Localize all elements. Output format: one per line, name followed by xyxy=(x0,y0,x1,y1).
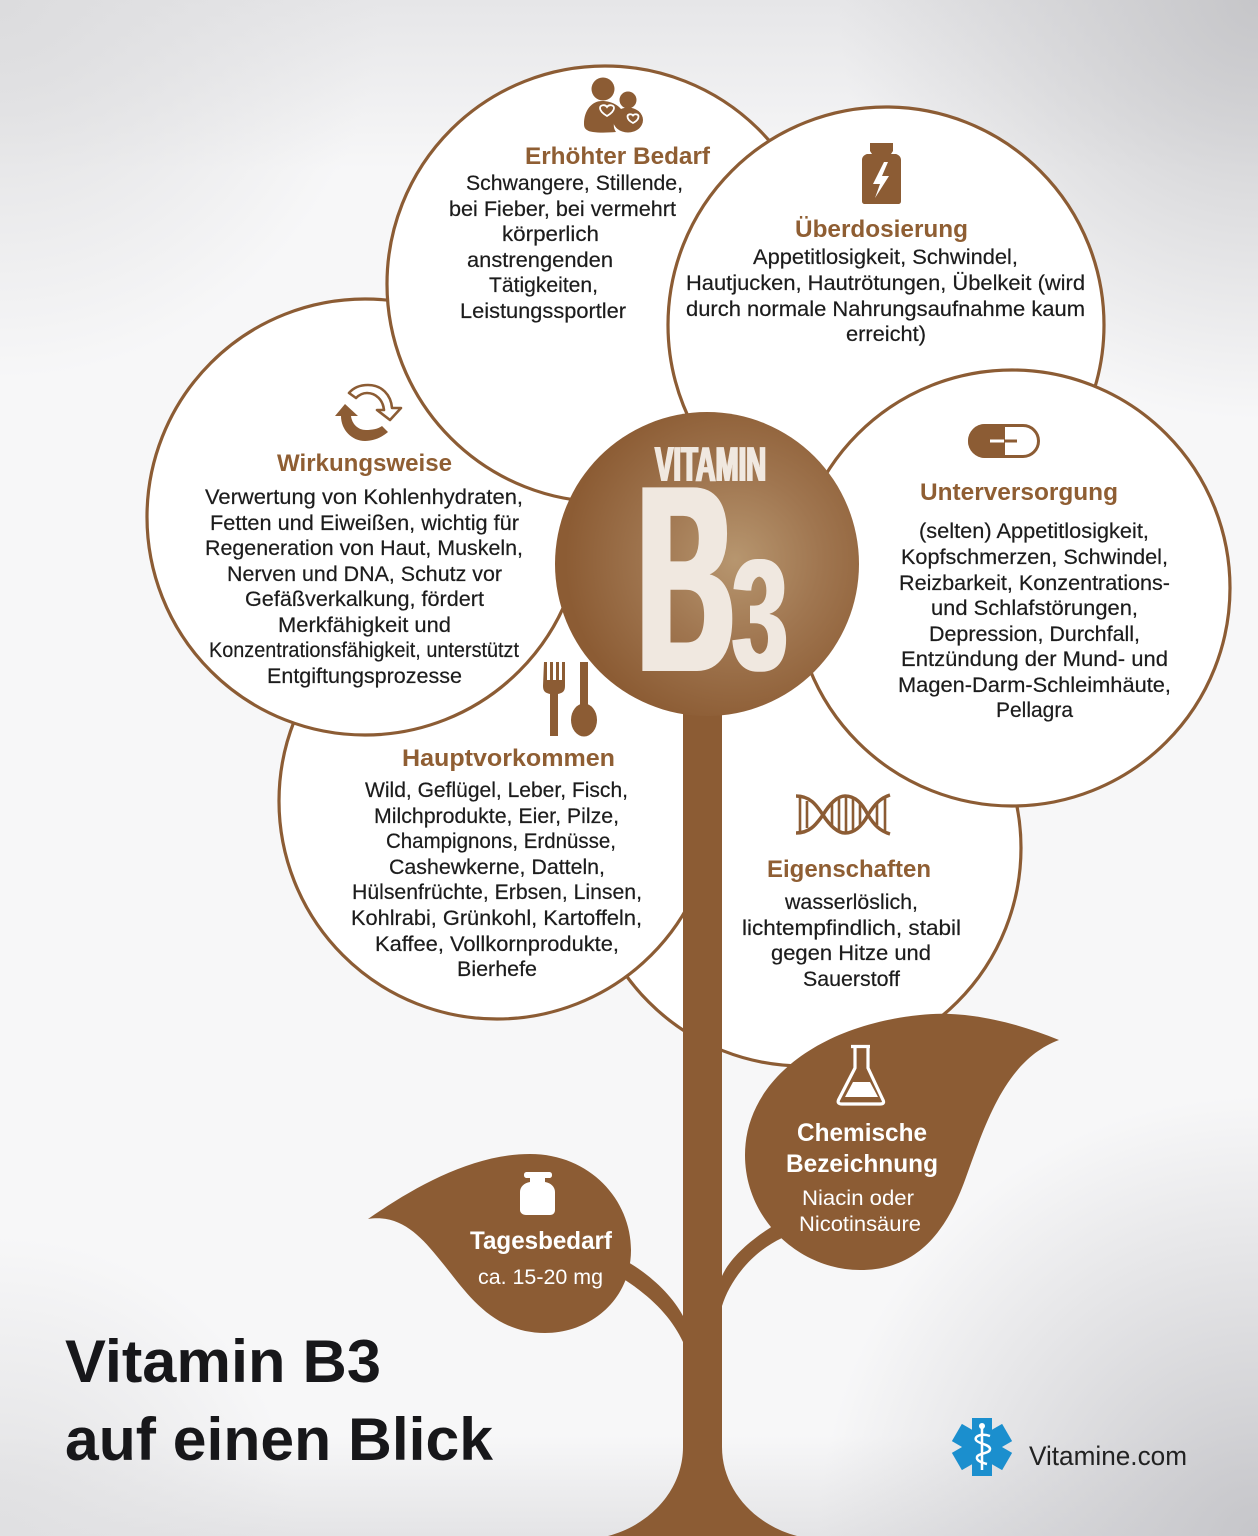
title: auf einen Blick xyxy=(65,1406,494,1473)
text: Hauptvorkommen body: Hülsenfrüchte, Erbsen, Linsen, xyxy=(352,881,642,904)
text: Hauptvorkommen body: Wild, Geflügel, Leber, Fisch, xyxy=(365,779,628,802)
panel: Wirkungsweise xyxy=(147,299,583,735)
heading: Hauptvorkommen: Hauptvorkommen xyxy=(402,745,615,772)
panel: Eigenschaften xyxy=(585,630,1021,1066)
text: Erhöhter Bedarf body: Tätigkeiten, xyxy=(489,274,598,297)
text: Hauptvorkommen body: Kaffee, Vollkornprodukte, xyxy=(375,933,619,956)
title xyxy=(65,1328,494,1473)
leaf: Tagesbedarf: ca. 15-20 mg xyxy=(478,1266,603,1289)
text: Hauptvorkommen body: Kohlrabi, Grünkohl, Kartoffeln, xyxy=(351,907,642,930)
text: Erhöhter Bedarf body: körperlich xyxy=(502,223,599,246)
text: Unterversorgung body: Magen-Darm-Schleimhäute, xyxy=(898,674,1171,697)
text: Erhöhter Bedarf body: anstrengenden xyxy=(467,249,613,272)
text: Wirkungsweise body: Fetten und Eiweißen, wichtig für xyxy=(210,512,519,535)
text: Wirkungsweise body: Konzentrationsfähigkeit, unterstützt xyxy=(209,639,519,662)
icon: fork and spoon xyxy=(543,662,597,736)
centre circle: Vitamin B3 xyxy=(555,412,859,728)
text: Hauptvorkommen body: Cashewkerne, Datteln, xyxy=(389,856,605,879)
leaf: Chemische Bezeichnung: Bezeichnung xyxy=(786,1150,938,1178)
heading: Unterversorgung: Unterversorgung xyxy=(920,479,1118,506)
label: VITAMIN: VITAMIN xyxy=(655,438,766,492)
text: Unterversorgung body: und Schlafstörungen, xyxy=(931,597,1138,620)
icon: star of life xyxy=(952,1418,1012,1476)
text: Erhöhter Bedarf body xyxy=(449,172,683,323)
text: Überdosierung body xyxy=(686,246,1085,346)
icon: mother and child xyxy=(584,78,643,133)
text: Hauptvorkommen body xyxy=(351,779,642,981)
icon: capsule xyxy=(968,424,1038,458)
icon: flask xyxy=(838,1046,884,1104)
text: Unterversorgung body xyxy=(898,520,1171,722)
text: Überdosierung body: erreicht) xyxy=(846,323,926,346)
tree trunk and branches xyxy=(608,700,797,1536)
text: Erhöhter Bedarf body: Schwangere, Stillende, xyxy=(466,172,683,195)
text: Unterversorgung body: Entzündung der Mund- und xyxy=(901,648,1168,671)
text: Eigenschaften body: gegen Hitze und xyxy=(771,942,931,965)
text: Unterversorgung body: Pellagra xyxy=(996,699,1073,722)
icon: DNA helix xyxy=(796,795,890,834)
heading: Erhöhter Bedarf: Erhöhter Bedarf xyxy=(525,143,711,170)
text: Unterversorgung body: Depression, Durchfall, xyxy=(929,623,1140,646)
text: Eigenschaften body: lichtempfindlich, stabil xyxy=(742,917,961,940)
text: Unterversorgung body: Kopfschmerzen, Schwindel, xyxy=(901,546,1168,569)
text: Überdosierung body: durch normale Nahrungsaufnahme kaum xyxy=(686,298,1085,321)
text: Chemische Bezeichnung: Chemische xyxy=(797,1119,927,1147)
text: Erhöhter Bedarf body: bei Fieber, bei vermehrt xyxy=(449,198,676,221)
text: Wirkungsweise body: Regeneration von Haut, Muskeln, xyxy=(205,537,523,560)
text: Hauptvorkommen body: Bierhefe xyxy=(457,958,537,981)
leaf: Chemische Bezeichnung: Nicotinsäure xyxy=(799,1213,921,1236)
heading: Wirkungsweise: Wirkungsweise xyxy=(277,450,452,477)
text: Eigenschaften body: wasserlöslich, xyxy=(784,891,918,914)
text: Wirkungsweise body: Nerven und DNA, Schutz vor xyxy=(227,563,502,586)
leaf: Tagesbedarf xyxy=(368,1154,631,1333)
text: Wirkungsweise body: Entgiftungsprozesse xyxy=(267,665,462,688)
icon: bottle with lightning xyxy=(862,143,901,204)
icon: weight xyxy=(520,1172,555,1215)
panel: Unterversorgung xyxy=(794,370,1230,806)
text: Erhöhter Bedarf body: Leistungssportler xyxy=(460,300,626,323)
panel: Erhöhter Bedarf xyxy=(387,66,823,502)
heading: Überdosierung: Überdosierung xyxy=(795,216,968,243)
text: Hauptvorkommen body: Champignons, Erdnüsse, xyxy=(386,830,616,853)
heading: Eigenschaften: Eigenschaften xyxy=(767,856,931,883)
label: B: B xyxy=(638,429,734,728)
text: Unterversorgung body: (selten) Appetitlosigkeit, xyxy=(919,520,1149,543)
panel: Überdosierung xyxy=(668,107,1104,543)
text: Überdosierung body: Appetitlosigkeit, Schwindel, xyxy=(753,246,1018,269)
text: Tagesbedarf: Tagesbedarf xyxy=(470,1227,613,1255)
text: Wirkungsweise body xyxy=(205,486,523,688)
text: Unterversorgung body: Reizbarkeit, Konzentrations- xyxy=(899,572,1170,595)
text: Eigenschaften body xyxy=(742,891,961,991)
label: 3: 3 xyxy=(732,528,788,705)
panel: Hauptvorkommen xyxy=(279,583,715,1019)
leaf: Chemische Bezeichnung: Niacin oder xyxy=(802,1187,914,1210)
text: Hauptvorkommen body: Milchprodukte, Eier, Pilze, xyxy=(374,805,619,828)
icon: circular arrows xyxy=(335,385,401,441)
text: Wirkungsweise body: Verwertung von Kohlenhydraten, xyxy=(205,486,523,509)
leaf: Chemische Bezeichnung xyxy=(745,1014,1059,1270)
text: Eigenschaften body: Sauerstoff xyxy=(803,968,900,991)
text: Wirkungsweise body: Gefäßverkalkung, fördert xyxy=(245,588,484,611)
text: Überdosierung body: Hautjucken, Hautrötungen, Übelkeit (wird xyxy=(686,272,1085,295)
logo: Vitamine.com xyxy=(952,1418,1187,1476)
title: Vitamin B3 xyxy=(65,1328,381,1395)
text: Wirkungsweise body: Merkfähigkeit und xyxy=(278,614,451,637)
wordmark: Vitamine.com xyxy=(1029,1441,1187,1471)
